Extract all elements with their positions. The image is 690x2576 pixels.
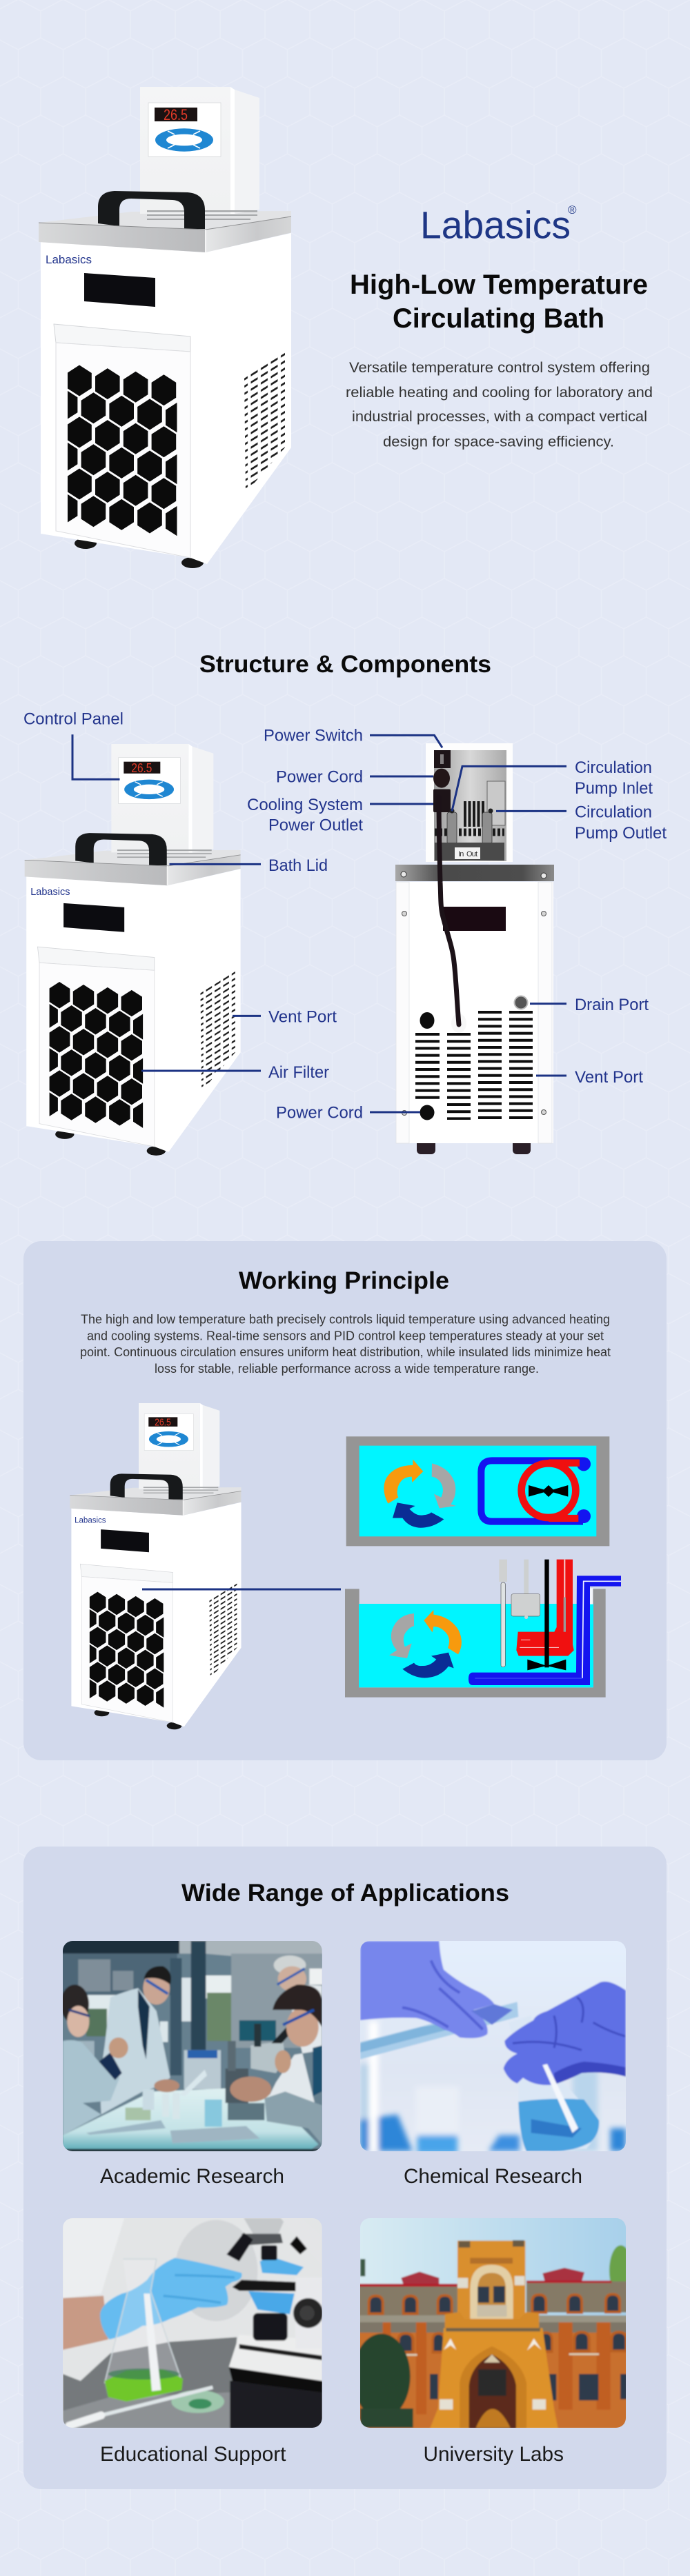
panel: working principle (23, 1241, 667, 1760)
arrows: cycle (389, 1610, 462, 1678)
photo: educational support (63, 2218, 322, 2428)
rear view device (395, 743, 554, 1154)
front view device: Labasics (30, 887, 70, 898)
brand logo: Labasics (420, 204, 571, 247)
level float (511, 1560, 540, 1619)
photo: academic research (63, 1941, 322, 2151)
product title: Circulating Bath (393, 303, 604, 334)
working principle description: and cooling systems. Real-time sensors and PID control keep temperatures steady at your set (87, 1329, 604, 1342)
diagram: bath side view (345, 1560, 621, 1698)
working principle description: point. Continuous circulation ensures uniform heat distribution, while insulated lids minimize heat (80, 1345, 611, 1359)
component labels: Circulation (575, 803, 652, 822)
device illustration: 26.5 (155, 1418, 171, 1429)
arrows: cycle (384, 1460, 456, 1528)
device brand label: Labasics (46, 253, 92, 266)
component labels: Power Cord (276, 768, 363, 787)
component labels: Vent Port (575, 1068, 643, 1087)
display reading: 26.5 (164, 106, 188, 123)
working principle description: loss for stable, reliable performance across a wide temperature range. (155, 1362, 539, 1376)
product description: Versatile temperature control system offering (349, 360, 650, 376)
pump loop (481, 1457, 591, 1523)
component labels: Cooling System (247, 796, 363, 814)
leader line to diagram (142, 1589, 341, 1590)
component leader lines (72, 734, 566, 1112)
caption: educational support: Educational Support (100, 2443, 286, 2466)
temperature probe (499, 1560, 507, 1667)
component labels: Circulation (575, 758, 652, 777)
hero product illustration (39, 87, 291, 568)
diagram: circulation top view (346, 1436, 609, 1546)
component labels: Power Switch (264, 727, 363, 745)
component labels: Control Panel (23, 710, 124, 729)
component labels: Drain Port (575, 996, 649, 1014)
caption: chemical research: Chemical Research (404, 2165, 582, 2188)
product description: industrial processes, with a compact vertical (352, 409, 647, 425)
working principle description (80, 1312, 611, 1376)
component labels: Air Filter (268, 1063, 329, 1082)
component labels: Power Outlet (268, 816, 363, 835)
heater coil (516, 1560, 574, 1656)
heading: working principle: Working Principle (239, 1267, 449, 1294)
coolant pipe (469, 1576, 621, 1685)
panel: applications (23, 1847, 667, 2489)
in and out label: In Out (458, 850, 477, 858)
working principle description: The high and low temperature bath precisely controls liquid temperature using advanced heating (81, 1312, 610, 1326)
photo: chemical research (360, 1941, 626, 2151)
product title (350, 270, 648, 334)
component labels: Bath Lid (268, 856, 328, 875)
product description: reliable heating and cooling for laboratory and (346, 385, 653, 401)
component labels: Power Cord (276, 1103, 363, 1122)
heading: applications: Wide Range of Applications (181, 1880, 509, 1906)
heading: structure and components: Structure & Components (199, 651, 491, 678)
component labels: Vent Port (268, 1008, 337, 1027)
component labels (23, 710, 667, 1122)
stirrer (527, 1560, 566, 1670)
component labels: Pump Outlet (575, 824, 667, 843)
product description (346, 360, 653, 450)
photo: university labs (360, 2218, 626, 2428)
front view device (25, 744, 241, 1156)
device illustration: Labasics (75, 1517, 106, 1525)
product description: design for space-saving efficiency. (383, 434, 614, 450)
front view device: 26.5 (131, 761, 152, 775)
device illustration (70, 1403, 241, 1729)
component labels: Pump Inlet (575, 779, 653, 798)
product title: High-Low Temperature (350, 270, 648, 300)
caption: academic research: Academic Research (100, 2165, 284, 2188)
brand logo: ® (568, 203, 577, 217)
caption: university labs: University Labs (424, 2443, 564, 2466)
